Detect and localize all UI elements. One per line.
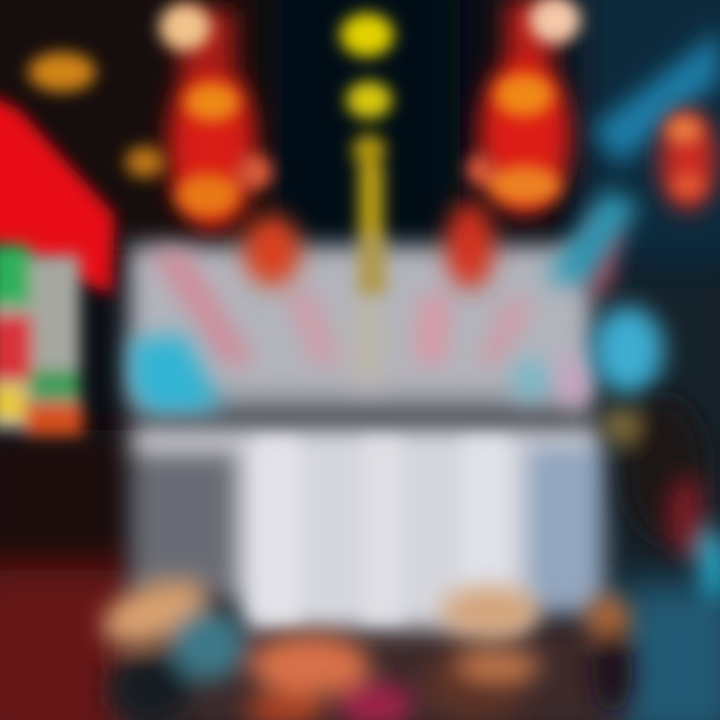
- panel: white lower stall: [130, 425, 605, 630]
- white stall columns: [255, 440, 507, 620]
- flag: red banner left: [0, 90, 115, 295]
- red lantern right: [446, 0, 571, 289]
- red lantern far right: [660, 110, 716, 210]
- lantern glows: [28, 0, 704, 217]
- panel: pink canopy stripes: [150, 220, 620, 408]
- red lantern left: [168, 10, 300, 286]
- panel: multicolour sign left: [0, 245, 83, 436]
- right side figure: [605, 398, 720, 601]
- yellow hanging lights: [340, 13, 394, 295]
- panel: grey canopy: [128, 245, 593, 415]
- bottom produce blobs: [94, 567, 632, 720]
- panel: blue canopy accents: [130, 30, 720, 415]
